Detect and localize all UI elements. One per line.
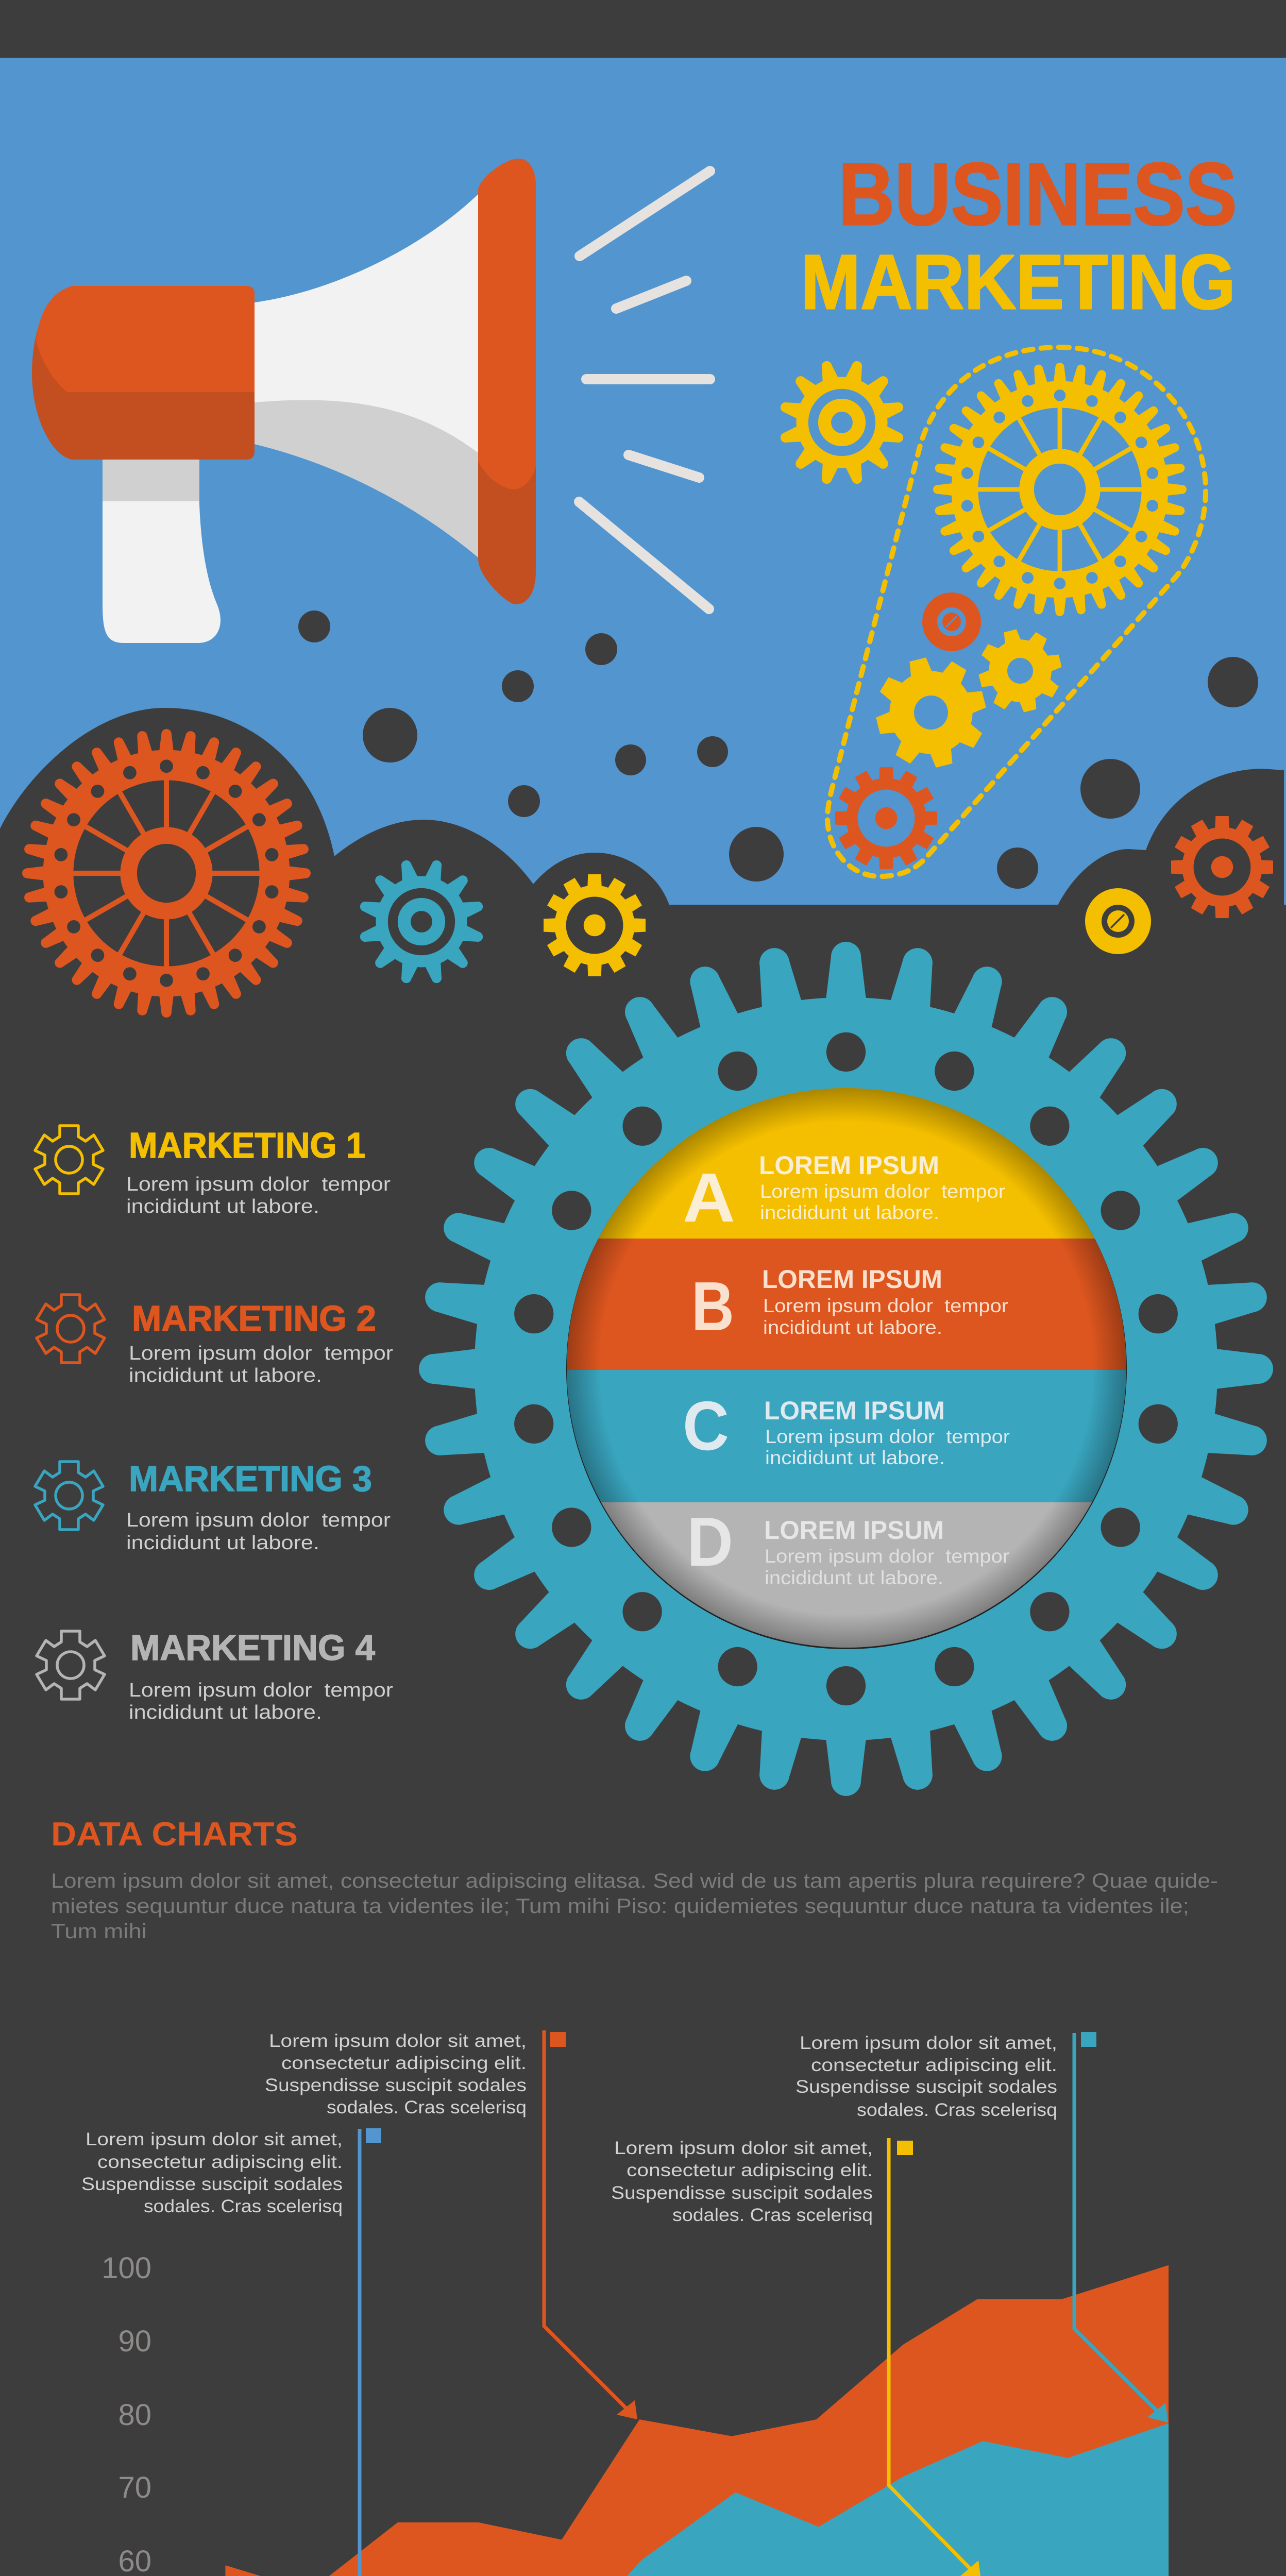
callout: teal: Lorem ipsum dolor sit amet, [800, 2033, 1057, 2053]
icon: sound lines [579, 171, 710, 609]
marketing list [35, 1125, 393, 1723]
callout: blue: sodales. Cras scelerisq [144, 2196, 343, 2216]
panel: blue header [0, 58, 1286, 905]
band C text: C [683, 1387, 729, 1465]
callout: orange: consectetur adipiscing elit. [281, 2053, 527, 2073]
callout: teal: Suspendisse suscipit sodales [796, 2077, 1057, 2097]
y axis labels: 100 [101, 2251, 151, 2285]
icon: medium yellow cog [875, 657, 987, 768]
icon: megaphone [32, 159, 536, 643]
icon: orange cog on right hill [1171, 816, 1273, 918]
band D text: LOREM IPSUM [764, 1516, 944, 1545]
icon: big orange gear [13, 720, 319, 1026]
big teal gear [393, 916, 1286, 1822]
band B text [691, 1265, 1008, 1345]
callout: orange: sodales. Cras scelerisq [327, 2097, 527, 2117]
megaphone rim [478, 159, 536, 604]
callout: yellow [611, 2138, 981, 2576]
item: marketing 2: MARKETING 2 [132, 1298, 376, 1338]
callout: yellow: sodales. Cras scelerisq [672, 2205, 873, 2225]
title: MARKETING [801, 239, 1236, 325]
text block: intro: Tum mihi [51, 1920, 147, 1943]
area chart [225, 2265, 1169, 2576]
item: marketing 1 [35, 1125, 391, 1217]
band C text: Lorem ipsum dolor tempor [765, 1426, 1010, 1447]
band A text: LOREM IPSUM [759, 1151, 939, 1180]
callout: orange [265, 2030, 637, 2419]
callout: yellow: consectetur adipiscing elit. [627, 2160, 873, 2180]
band A text: Lorem ipsum dolor tempor [760, 1181, 1005, 1202]
item: marketing 3: Lorem ipsum dolor tempor [126, 1510, 391, 1531]
icon: yellow screw [1085, 888, 1151, 954]
item: marketing 4: Lorem ipsum dolor tempor [129, 1680, 393, 1701]
item: marketing 1: MARKETING 1 [129, 1125, 365, 1165]
icon: orange screw [922, 592, 981, 651]
band D text: Lorem ipsum dolor tempor [765, 1546, 1009, 1567]
series: orange [225, 2265, 1169, 2576]
callout: blue: consectetur adipiscing elit. [97, 2152, 343, 2172]
item: marketing 3: incididunt ut labore. [126, 1532, 319, 1554]
band C text: LOREM IPSUM [764, 1396, 945, 1425]
y axis labels: 90 [118, 2325, 151, 2358]
floating dark dots [298, 611, 1258, 889]
callout: teal [796, 2032, 1168, 2422]
dark hills silhouette [0, 708, 1284, 905]
icon: teal sun gear [358, 858, 485, 985]
item: marketing 2: Lorem ipsum dolor tempor [129, 1343, 393, 1364]
band A text: A [683, 1159, 735, 1236]
megaphone cone [255, 194, 478, 557]
callout: blue: Suspendisse suscipit sodales [81, 2174, 343, 2194]
item: marketing 2: incididunt ut labore. [129, 1365, 322, 1386]
icon: yellow sun gear [779, 359, 905, 486]
heading: data charts: DATA CHARTS [51, 1815, 298, 1853]
icon: big yellow gear [925, 355, 1194, 624]
title [801, 145, 1237, 325]
panel: ABCD disc [562, 1082, 1133, 1652]
band B text: LOREM IPSUM [762, 1265, 942, 1294]
band C text: incididunt ut labore. [765, 1447, 945, 1468]
callout: yellow: Lorem ipsum dolor sit amet, [614, 2138, 873, 2158]
band D text: incididunt ut labore. [765, 1567, 943, 1588]
series: teal [225, 2424, 1169, 2576]
title: BUSINESS [838, 145, 1237, 244]
callout: yellow: Suspendisse suscipit sodales [611, 2183, 873, 2203]
callout: blue [81, 2128, 453, 2576]
band A text [683, 1151, 1005, 1236]
item: marketing 4: incididunt ut labore. [129, 1702, 322, 1723]
callout: orange: Suspendisse suscipit sodales [265, 2075, 527, 2095]
y axis labels: 80 [118, 2398, 151, 2432]
text block: intro: Lorem ipsum dolor sit amet, consectetur adipiscing elitasa. Sed wid de us tam apertis plura requirere? Quae quide- [51, 1870, 1218, 1892]
megaphone handle [103, 460, 221, 643]
band A text: incididunt ut labore. [760, 1202, 939, 1223]
megaphone body [32, 286, 255, 460]
band B text: Lorem ipsum dolor tempor [763, 1295, 1008, 1316]
icon: small yellow cog [978, 629, 1062, 713]
band C text [683, 1387, 1010, 1468]
item: marketing 4: MARKETING 4 [130, 1628, 375, 1668]
y axis labels: 70 [118, 2471, 151, 2504]
callout: orange: Lorem ipsum dolor sit amet, [269, 2031, 527, 2051]
text block: intro: mietes sequuntur duce natura ta videntes ile; Tum mihi Piso: quidemietes sequuntur duce natura ta videntes ile; [51, 1895, 1189, 1918]
icon: orange cog on belt [835, 767, 937, 869]
item: marketing 1: incididunt ut labore. [126, 1196, 319, 1217]
icon: yellow cog on hill [544, 874, 646, 976]
y axis labels [101, 2251, 151, 2576]
band D text: D [687, 1503, 733, 1581]
item: marketing 2 [37, 1295, 393, 1386]
item: marketing 4 [37, 1628, 393, 1723]
dashed chain belt [827, 347, 1206, 876]
item: marketing 3 [35, 1459, 391, 1554]
callout: teal: sodales. Cras scelerisq [857, 2100, 1057, 2120]
band B text: B [691, 1267, 734, 1345]
band D text [687, 1503, 1009, 1588]
text block: intro [51, 1870, 1218, 1943]
callout: blue: Lorem ipsum dolor sit amet, [86, 2129, 343, 2149]
band B text: incididunt ut labore. [763, 1317, 942, 1338]
item: marketing 3: MARKETING 3 [129, 1459, 372, 1499]
callout: teal: consectetur adipiscing elit. [811, 2055, 1057, 2075]
item: marketing 1: Lorem ipsum dolor tempor [126, 1174, 391, 1195]
